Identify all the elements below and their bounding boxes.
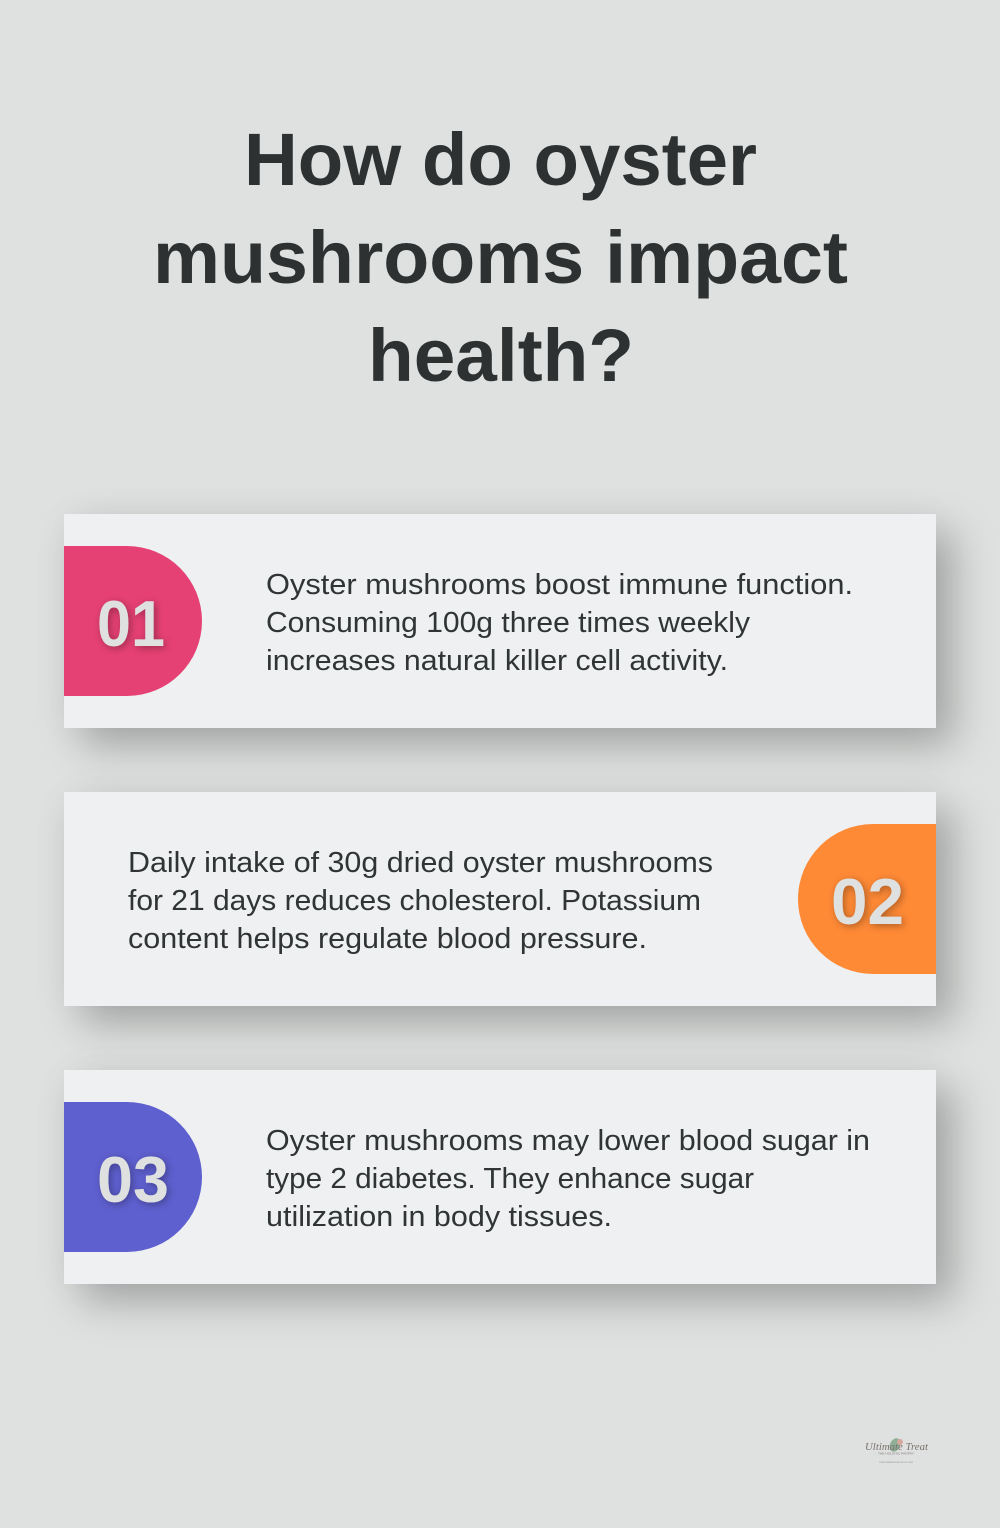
text: blood sugar: Oyster mushrooms may lower blood sugar in: [266, 1125, 870, 1157]
panel: step 01 immune function: [64, 514, 936, 728]
logo: Ultimate Treat: THE HOLISTIC PANTRY: [878, 1452, 914, 1456]
text: blood sugar: [266, 1125, 870, 1233]
text: immune function: Oyster mushrooms boost immune function.: [266, 569, 853, 601]
badge: 03: 03: [97, 1143, 169, 1216]
text: blood sugar: type 2 diabetes. They enhance sugar: [266, 1163, 754, 1195]
badge: 02: 02: [831, 865, 904, 938]
panel: step 03 blood sugar: [64, 1070, 936, 1284]
logo: Ultimate Treat: ultimatetreat.com.au: [879, 1460, 913, 1464]
logo: Ultimate Treat: Ultimate Treat: [865, 1441, 929, 1453]
badge: 01: [64, 546, 202, 696]
text: cholesterol: [128, 847, 713, 955]
title: mushrooms impact: [153, 216, 848, 299]
text: cholesterol: content helps regulate blood pressure.: [128, 923, 647, 955]
badge: 03: [64, 1102, 202, 1252]
text: immune function: Consuming 100g three times weekly: [266, 607, 751, 639]
badge: 02: [798, 824, 936, 974]
text: cholesterol: Daily intake of 30g dried oyster mushrooms: [128, 847, 713, 879]
logo: Ultimate Treat: [865, 1438, 929, 1464]
badge: 01: 01: [97, 587, 165, 660]
panel: step 02 cholesterol and blood pressure: [64, 792, 936, 1006]
title: [153, 118, 848, 397]
text: cholesterol: for 21 days reduces cholesterol. Potassium: [128, 885, 701, 917]
text: blood sugar: utilization in body tissues.: [266, 1201, 612, 1233]
title: How do oyster: [244, 118, 757, 201]
title: health?: [368, 314, 634, 397]
text: immune function: increases natural killer cell activity.: [266, 645, 728, 677]
text: immune function: [266, 569, 853, 677]
